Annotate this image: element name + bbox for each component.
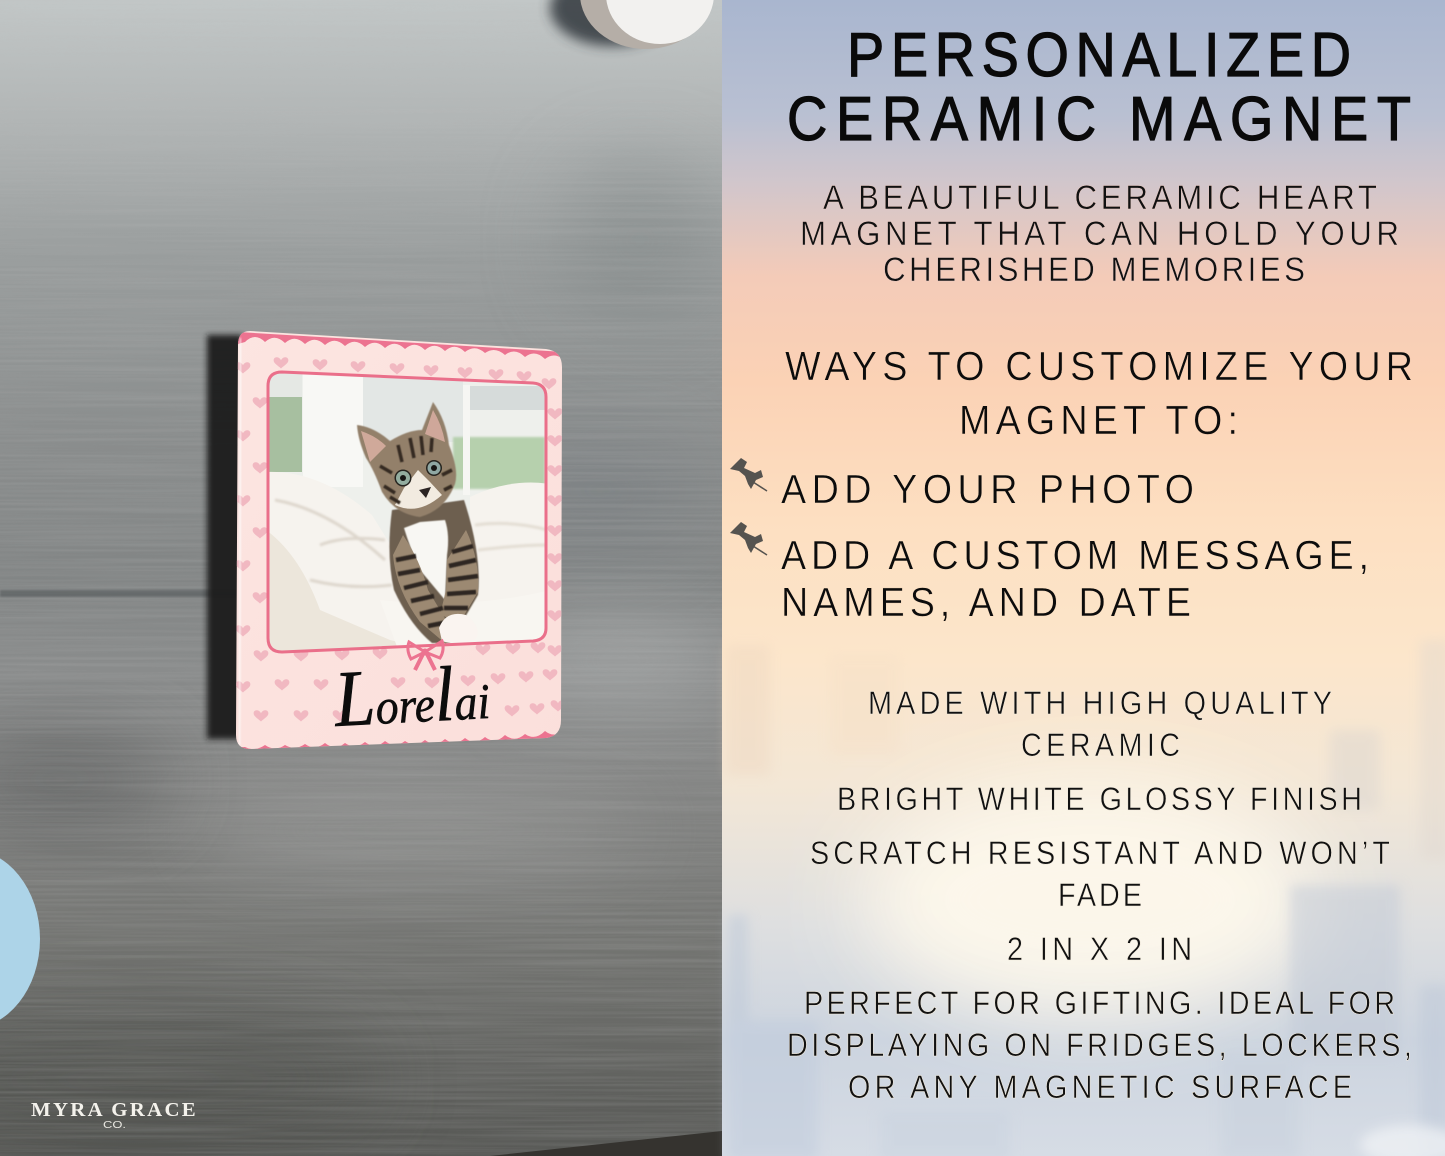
title: PERSONALIZED — [847, 21, 1351, 90]
kitten legs — [393, 535, 452, 644]
customization list: NAMES, AND DATE — [781, 580, 1191, 625]
photo: kitten on blanket — [266, 370, 550, 660]
feature list: DISPLAYING ON FRIDGES, LOCKERS, — [787, 1028, 1412, 1063]
icon: push pin 1 — [730, 458, 767, 491]
panel: brushed metal fridge photo — [0, 0, 730, 1156]
feature list: 2 IN X 2 IN — [1007, 932, 1192, 967]
subtitle text block: A BEAUTIFUL CERAMIC HEART — [823, 178, 1377, 216]
logo: Myra Grace Co. — [31, 1103, 195, 1128]
blanket — [270, 472, 274, 473]
icon: push pin 2 — [730, 522, 767, 555]
feature list: MADE WITH HIGH QUALITY — [868, 686, 1332, 721]
photo frame border — [268, 372, 546, 652]
heading: ways to customize: WAYS TO CUSTOMIZE YOUR — [785, 344, 1413, 389]
kitten body — [389, 500, 479, 643]
title — [787, 21, 1411, 154]
customization list — [781, 467, 1369, 625]
feature list: SCRATCH RESISTANT AND WON’T — [810, 836, 1390, 871]
panel: ceramic magnet — [207, 325, 570, 755]
feature list: PERFECT FOR GIFTING. IDEAL FOR — [804, 986, 1395, 1021]
panel: sky background — [722, 0, 1445, 1156]
title: CERAMIC MAGNET — [787, 85, 1411, 154]
subtitle text block: MAGNET THAT CAN HOLD YOUR — [800, 214, 1399, 252]
scalloped bottom border — [242, 731, 555, 749]
logo: Myra Grace Co.: CO. — [103, 1120, 126, 1131]
icon: blue round magnet at left — [0, 858, 40, 1020]
heading: ways to customize: MAGNET TO: — [959, 398, 1238, 443]
glossy edge — [239, 338, 241, 745]
feature list: FADE — [1058, 878, 1142, 913]
subtitle text block: CHERISHED MEMORIES — [883, 250, 1305, 288]
logo: Myra Grace Co.: MYRA GRACE — [31, 1099, 198, 1121]
icon: round magnet at top — [550, 0, 714, 49]
heading: ways to customize — [785, 344, 1413, 443]
heart pattern — [236, 357, 565, 721]
feature list: BRIGHT WHITE GLOSSY FINISH — [837, 782, 1362, 817]
subtitle text block — [800, 178, 1399, 288]
feature list: OR ANY MAGNETIC SURFACE — [848, 1070, 1352, 1105]
scalloped top border — [238, 332, 565, 361]
dark fridge trim — [490, 1131, 722, 1156]
feature list: CERAMIC — [1021, 728, 1180, 763]
name text: Lorelai: Lorelai — [331, 648, 492, 744]
feature list — [787, 686, 1412, 1105]
customization list: ADD YOUR PHOTO — [781, 467, 1194, 512]
customization list: ADD A CUSTOM MESSAGE, — [781, 533, 1369, 578]
icon: pink bow — [408, 641, 443, 670]
kitten head — [357, 402, 456, 517]
